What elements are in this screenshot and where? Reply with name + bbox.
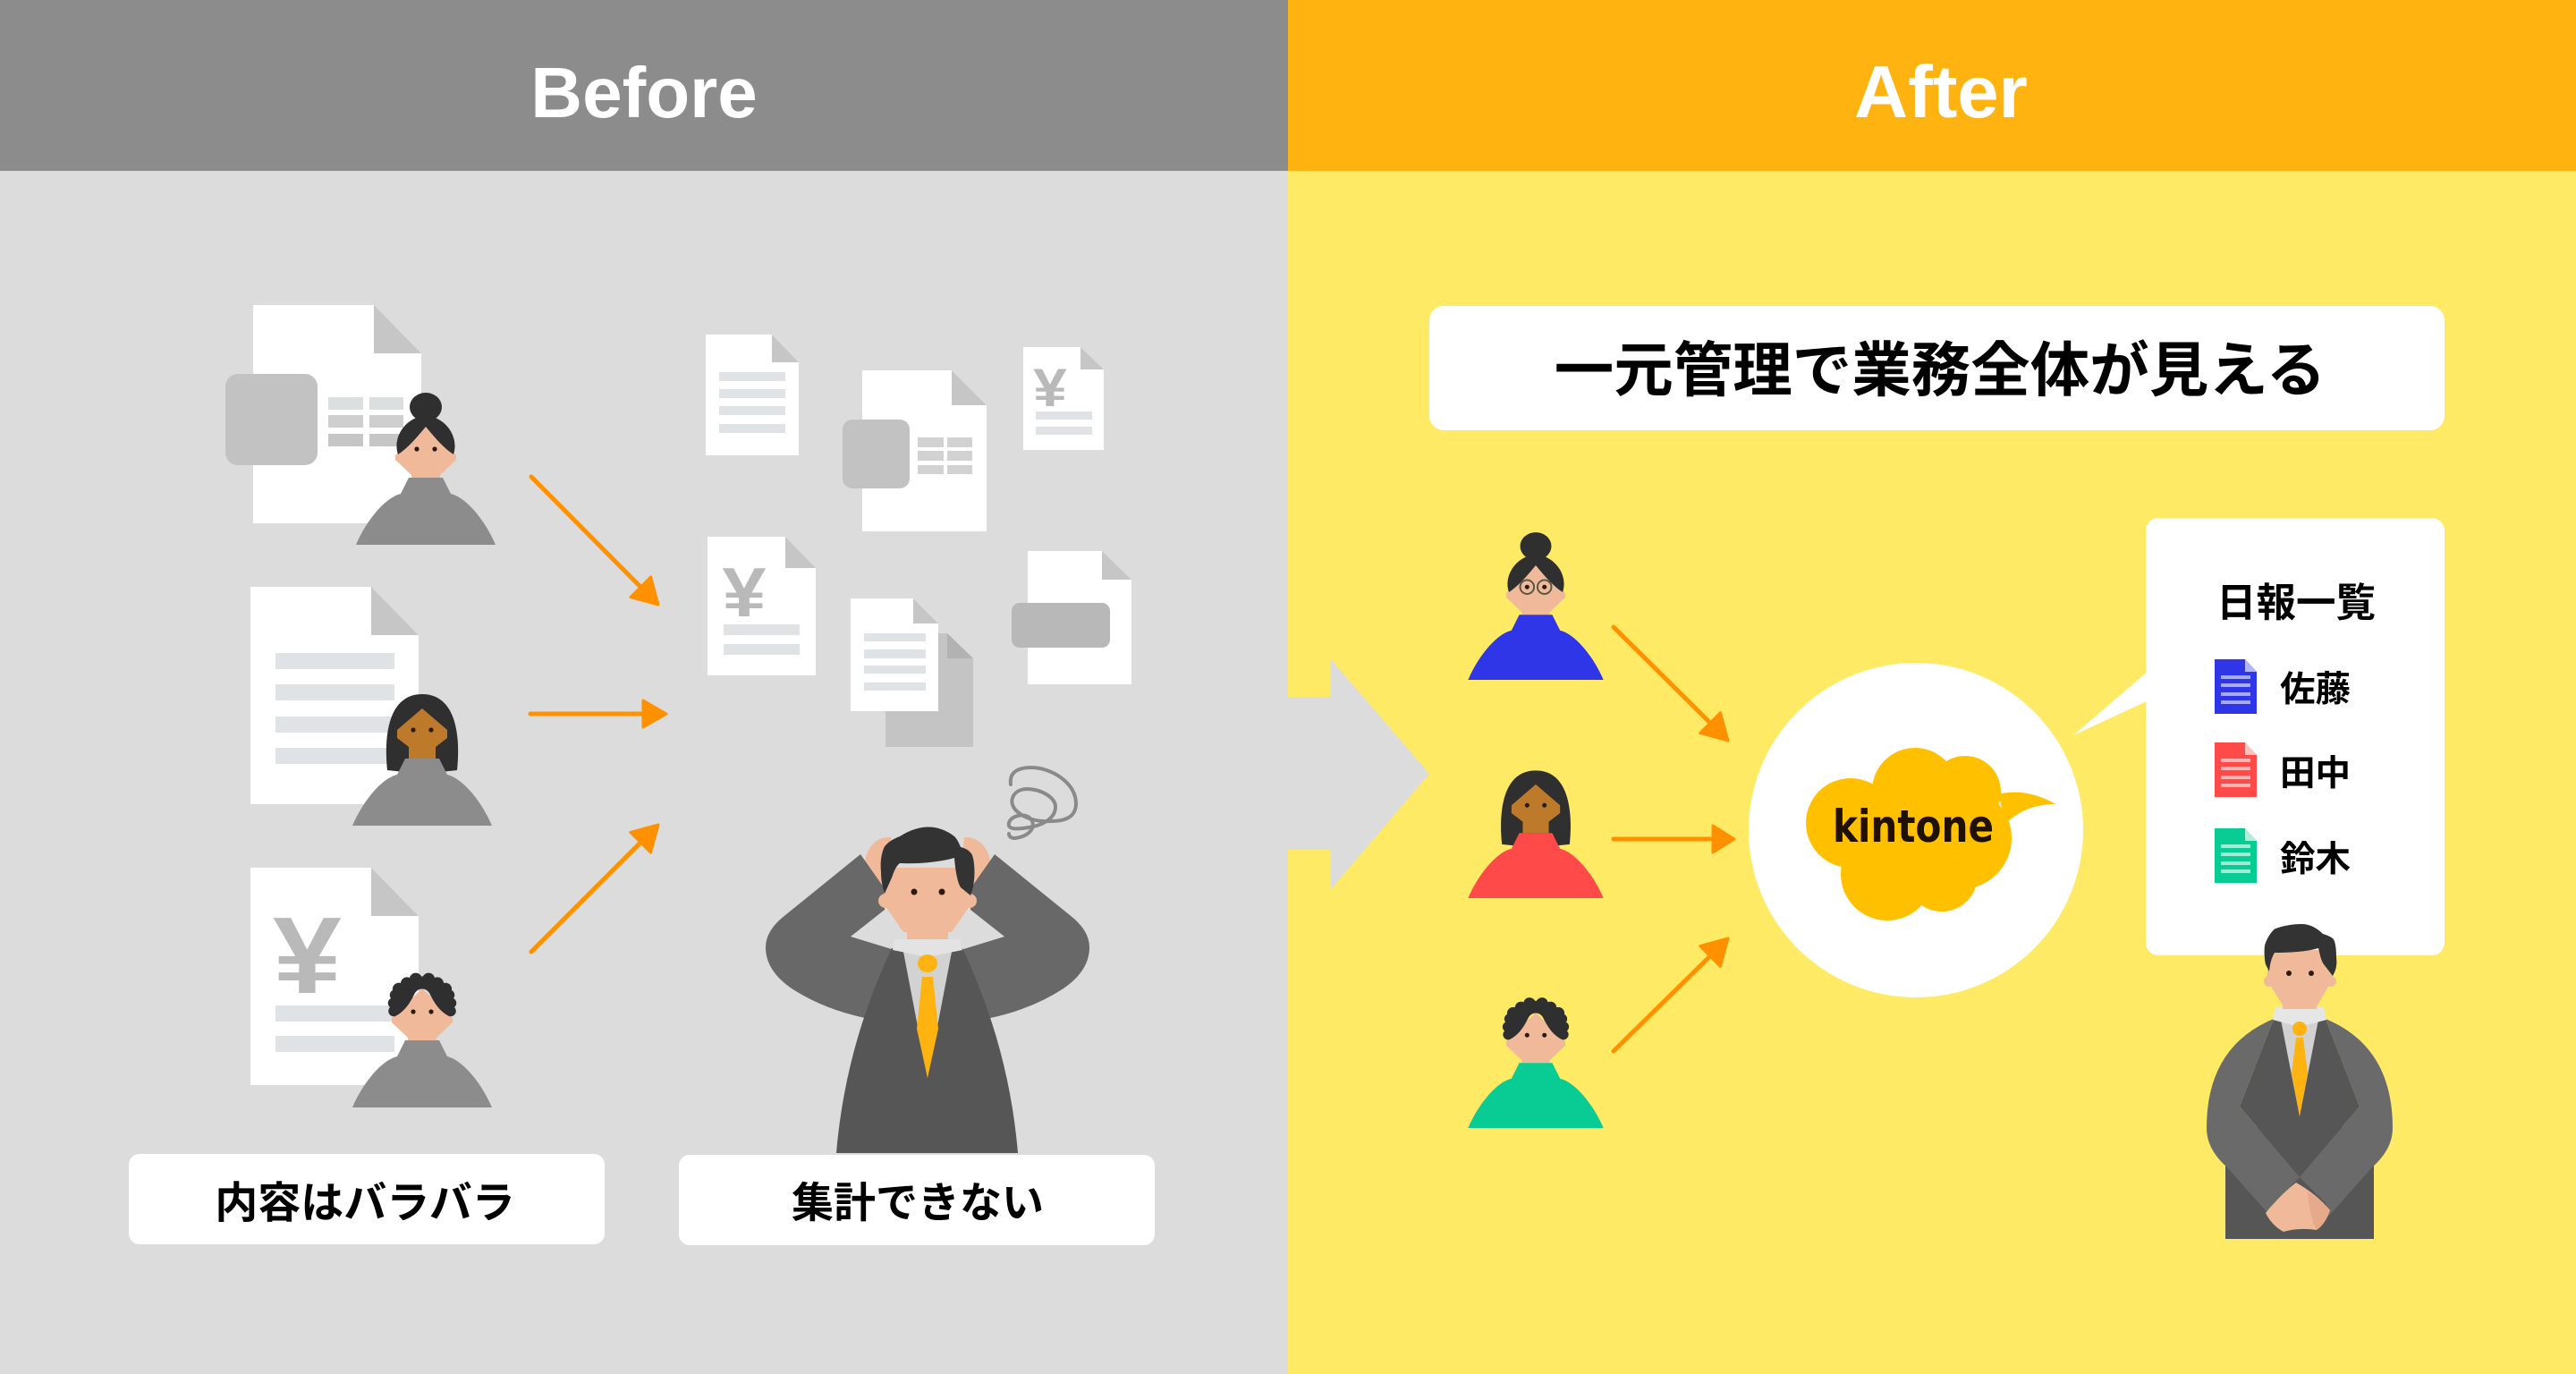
name: 田中: 田中 bbox=[2280, 754, 2351, 793]
name: 佐藤: 佐藤 bbox=[2280, 670, 2351, 709]
speech bubble: 日報一覧 list: 日報一覧 bbox=[2216, 581, 2376, 625]
icon: person with glasses (blue) bbox=[1468, 532, 1604, 680]
icon: invoice document with yen (bottom left): ¥ bbox=[273, 894, 342, 1016]
speech bubble: 日報一覧 list bbox=[2073, 518, 2445, 955]
icon: scattered document A bbox=[706, 335, 799, 455]
arrow: green person to kintone bbox=[1614, 938, 1728, 1051]
label: 内容はバラバラ: 内容はバラバラ bbox=[215, 1180, 515, 1227]
name: 鈴木: 鈴木 bbox=[2280, 840, 2351, 879]
panel: after background bbox=[1288, 0, 2576, 1374]
kintone circle with logo: kintone bbox=[1833, 801, 1994, 852]
icon: scattered yen document D bbox=[708, 537, 816, 675]
arrow: top left bbox=[531, 477, 658, 605]
icon: green report bbox=[2215, 828, 2257, 883]
header: After bbox=[1288, 0, 2576, 171]
panel: before background bbox=[0, 0, 1288, 1374]
icon: invoice document with yen (bottom left) bbox=[250, 868, 419, 1085]
illustration: troubled manager holding head bbox=[766, 827, 1089, 1153]
icon: document with box and table (top left) bbox=[225, 305, 421, 523]
kintone circle with logo bbox=[1749, 663, 2083, 997]
arrow: red person to kintone bbox=[1614, 826, 1734, 852]
label: 集計できない: 集計できない bbox=[792, 1179, 1044, 1226]
icon: person with curly hair (gray) bbox=[352, 973, 492, 1107]
header: Before bbox=[0, 0, 1288, 171]
icon: kintone cloud bbox=[1806, 748, 2055, 920]
icon: document with text lines (middle left) bbox=[250, 587, 419, 804]
title box: 一元管理で業務全体が見える bbox=[1429, 306, 2445, 430]
icon: scattered document G with wide box bbox=[1012, 551, 1131, 684]
icon: scattered document B with box and table bbox=[843, 370, 987, 531]
header: After: After bbox=[1854, 50, 2028, 133]
arrow: before to after bbox=[1288, 659, 1429, 889]
icon: scattered yen document C: ¥ bbox=[1033, 358, 1067, 418]
icon: person with long hair (red) bbox=[1468, 770, 1604, 898]
icon: scattered yen document C bbox=[1023, 347, 1104, 450]
illustration: calm manager bbox=[2207, 924, 2393, 1239]
icon: red report bbox=[2215, 742, 2257, 797]
icon: person with bun hair (gray) bbox=[356, 393, 496, 545]
arrow: blue person to kintone bbox=[1614, 627, 1728, 741]
icon: confusion scribble bbox=[1009, 768, 1076, 838]
icon: scattered yen document D: ¥ bbox=[722, 554, 767, 632]
icon: stacked documents E bbox=[851, 598, 973, 747]
header: Before: Before bbox=[530, 53, 758, 132]
label: 内容はバラバラ bbox=[129, 1154, 605, 1244]
title box: 一元管理で業務全体が見える: 一元管理で業務全体が見える bbox=[1555, 338, 2326, 404]
icon: person with curly hair (green) bbox=[1468, 997, 1604, 1128]
icon: person with long hair (gray) bbox=[352, 694, 492, 826]
arrow: bottom left bbox=[531, 825, 658, 952]
arrow: middle left bbox=[530, 700, 666, 727]
icon: blue report bbox=[2215, 659, 2257, 714]
label: 集計できない bbox=[679, 1155, 1155, 1245]
